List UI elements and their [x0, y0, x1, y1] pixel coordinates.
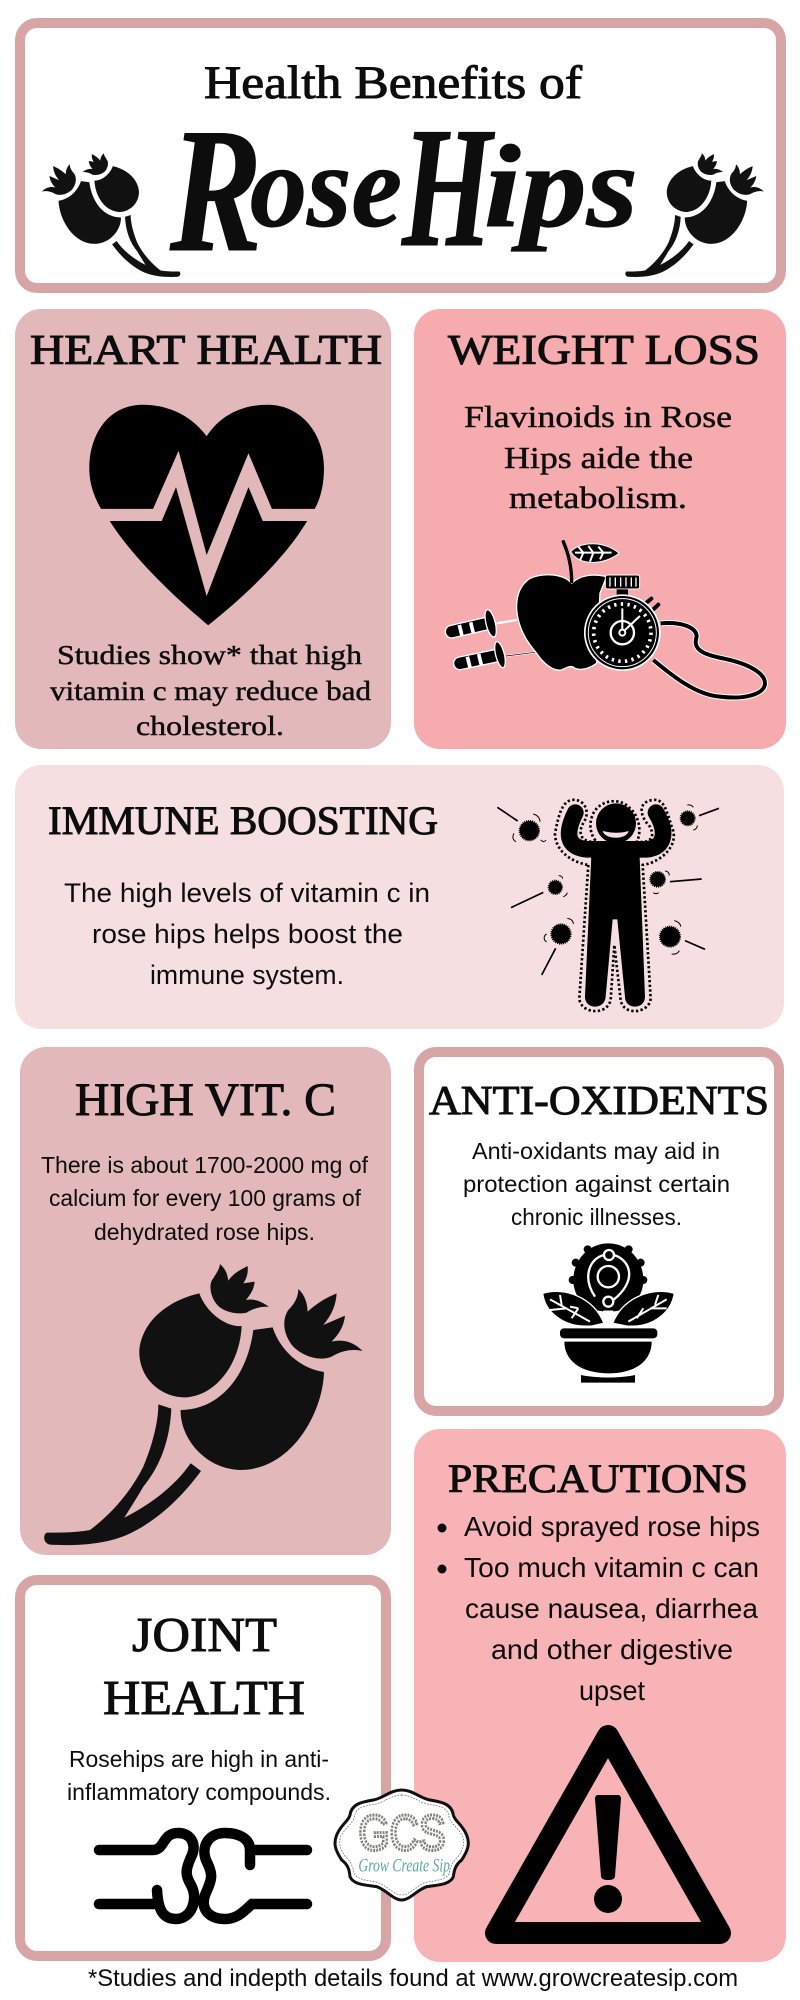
heading: joint health: JOINT	[132, 1607, 277, 1662]
text: immune body: The high levels of vitamin c in	[64, 878, 430, 908]
heading: rosehips script: R	[169, 91, 262, 289]
icon: potted plant	[543, 1243, 674, 1383]
heading: joint health	[103, 1607, 305, 1725]
text: weight loss body	[464, 399, 732, 515]
text: high vit c body	[41, 1152, 369, 1245]
logo: grow create sip	[335, 1790, 468, 1900]
heading: health benefits of: Health Benefits of	[204, 57, 582, 109]
logo: grow create sip: GCS	[358, 1805, 446, 1861]
text: weight loss body: metabolism.	[509, 480, 687, 515]
text: joint health body: Rosehips are high in anti-	[69, 1746, 329, 1772]
text: anti-oxidents body: protection against certain	[463, 1171, 730, 1197]
heading: anti-oxidents: ANTI-OXIDENTS	[429, 1077, 769, 1123]
list: precautions bullets: Too much vitamin c can	[464, 1552, 759, 1583]
heading: rosehips script: ips	[484, 121, 638, 252]
text: weight loss body: Hips aide the	[504, 440, 693, 475]
icon: rose hips large	[44, 1264, 363, 1545]
heading: high vit c: HIGH VIT. C	[75, 1074, 336, 1126]
heading: rosehips script: H	[401, 93, 495, 283]
icon: warning triangle	[496, 1736, 720, 1933]
icon: joint	[99, 1833, 307, 1919]
panel: heart health	[15, 309, 391, 749]
heading: immune boosting: IMMUNE BOOSTING	[48, 798, 438, 843]
text: immune body	[64, 878, 430, 990]
text: immune body: rose hips helps boost the	[92, 919, 403, 949]
list: precautions bullets: and other digestive	[491, 1634, 733, 1665]
icon: rose hips right	[625, 153, 764, 277]
footer: sources note: *Studies and indepth details found at www.growcreatesip.com	[88, 1965, 738, 1992]
list: precautions bullets	[438, 1511, 760, 1706]
text: anti-oxidents body: chronic illnesses.	[511, 1204, 682, 1230]
panel: joint health	[20, 1580, 386, 1956]
heading: precautions: PRECAUTIONS	[448, 1456, 748, 1501]
text: high vit c body: There is about 1700-2000 mg of	[41, 1152, 369, 1178]
text: joint health body: inflammatory compounds.	[67, 1779, 331, 1805]
panel: immune boosting	[15, 765, 784, 1029]
text: immune body: immune system.	[150, 960, 344, 990]
heading: heart health: HEART HEALTH	[30, 328, 382, 374]
text: weight loss body: Flavinoids in Rose	[464, 399, 732, 434]
text: anti-oxidents body: Anti-oxidants may aid in	[472, 1138, 720, 1164]
icon: rose hips left	[42, 153, 180, 277]
text: joint health body	[67, 1746, 331, 1805]
list: precautions bullets: Avoid sprayed rose hips	[464, 1511, 760, 1542]
panel: high vit c	[20, 1047, 391, 1555]
heading: joint health: HEALTH	[103, 1670, 305, 1725]
list: precautions bullets: upset	[579, 1675, 645, 1706]
panel: anti-oxidents	[419, 1052, 779, 1411]
logo: grow create sip: Grow Create Sip	[358, 1856, 450, 1877]
heading: rosehips script: ose	[250, 121, 402, 252]
list: precautions bullets: cause nausea, diarrhea	[465, 1593, 758, 1624]
icon: apple stopwatch and jump rope	[452, 542, 765, 698]
text: heart body: Studies show* that high	[57, 640, 363, 670]
text: heart body: vitamin c may reduce bad	[50, 676, 372, 706]
text: anti-oxidents body	[463, 1138, 730, 1230]
text: high vit c body: dehydrated rose hips.	[94, 1219, 315, 1245]
panel: title	[20, 23, 781, 289]
panel: weight loss	[414, 309, 786, 749]
text: heart body: cholesterol.	[136, 711, 284, 741]
icon: person repelling germs	[497, 800, 719, 1011]
text: high vit c body: calcium for every 100 grams of	[49, 1185, 362, 1211]
heading: weight loss: WEIGHT LOSS	[448, 328, 760, 374]
text: heart body	[50, 640, 372, 741]
icon: heart with pulse	[89, 405, 324, 625]
panel: precautions	[414, 1429, 786, 1962]
